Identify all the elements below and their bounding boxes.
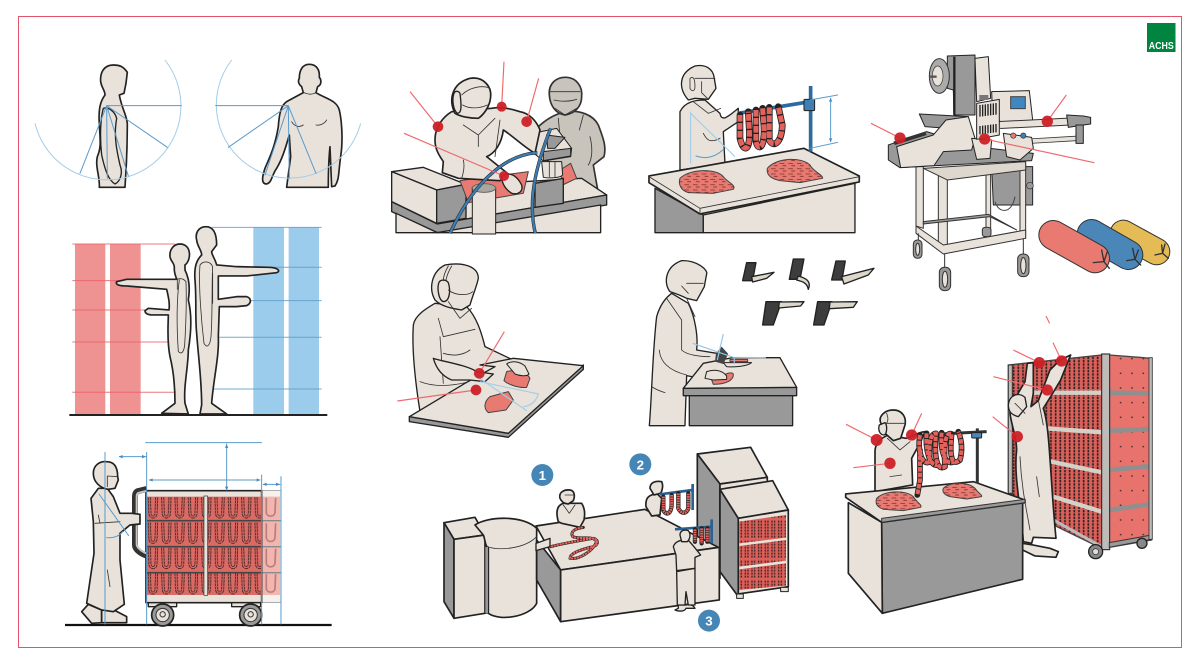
floor line — [69, 412, 327, 418]
panel: reach height comparison — [69, 227, 327, 415]
cart extension ghost — [262, 491, 281, 603]
air hoses — [450, 128, 551, 233]
workstation person 3 — [673, 530, 701, 611]
badge 2: 2 — [637, 457, 644, 472]
sausage piles — [679, 159, 823, 193]
badge 3: 3 — [705, 614, 713, 629]
cart with sausages — [146, 491, 262, 607]
hopper and body — [888, 114, 1033, 168]
knife 4 — [763, 302, 782, 325]
red height bars — [72, 244, 175, 415]
worker — [649, 261, 723, 426]
badge 1: 1 — [539, 468, 547, 483]
hanging sausages — [740, 107, 782, 148]
logo: ACHS: ACHS — [1149, 40, 1174, 52]
panel: two workers at trimming station — [392, 62, 607, 234]
knife 5 blade — [829, 302, 857, 309]
badge 2 — [629, 453, 651, 475]
tall rack — [1008, 354, 1152, 559]
hanging sausages — [917, 432, 962, 495]
panel: stuffing machine — [871, 55, 1168, 291]
knife 1 — [743, 263, 756, 281]
worker — [413, 264, 528, 412]
workstation person 2 — [646, 481, 663, 516]
worker — [680, 66, 738, 170]
figure: tall worker — [195, 227, 279, 414]
knife 2 blade — [797, 276, 809, 289]
workbench — [392, 178, 607, 233]
sausage strand on table — [551, 527, 597, 559]
stand — [738, 86, 815, 152]
posture lines — [693, 334, 766, 364]
machine frame — [916, 162, 1026, 254]
panel: production line overview — [444, 447, 788, 632]
strain points — [397, 332, 504, 401]
table — [649, 148, 859, 233]
hanging rack 3 — [675, 519, 712, 543]
bench — [683, 358, 797, 426]
main worker — [435, 78, 540, 194]
meat and hands — [705, 347, 752, 384]
badge 3 — [698, 610, 720, 632]
knife 5 — [814, 302, 832, 325]
posture lines and dimensions — [99, 443, 281, 624]
machine casters — [913, 227, 1029, 291]
knife 1 blade — [752, 272, 774, 282]
arm over table — [433, 358, 493, 382]
worker — [82, 462, 140, 623]
tabletop — [846, 482, 1025, 522]
storage rack — [720, 481, 788, 598]
panel: standing cutting at bench with knives — [649, 259, 874, 426]
range of motion: front view — [216, 60, 361, 178]
posture lines — [691, 95, 838, 163]
motor and flywheel — [929, 55, 991, 115]
extension arms — [1000, 115, 1091, 143]
panel: shoulder range of motion figures — [35, 60, 361, 187]
strain points — [846, 316, 1067, 469]
floor line — [65, 621, 332, 628]
hopper unit — [444, 517, 537, 618]
panel: hanging and racking sausages — [846, 316, 1152, 613]
worker reaching up — [1008, 355, 1071, 557]
background worker — [537, 77, 605, 193]
tall cabinet back — [697, 447, 767, 578]
left block — [392, 167, 466, 223]
control panel — [992, 91, 1033, 123]
workstation person 1 — [557, 490, 585, 527]
vent housing — [977, 95, 999, 139]
cart handle — [135, 489, 147, 556]
stand — [940, 428, 987, 483]
sausage casing rolls — [1053, 233, 1168, 268]
badge 1 — [531, 464, 553, 486]
cart wheels — [152, 604, 262, 626]
strain points — [404, 62, 539, 181]
range of motion: side view — [35, 60, 181, 180]
meat on bench — [460, 163, 577, 203]
panel: hanging sausages at stand — [649, 66, 859, 233]
machine — [533, 128, 572, 207]
hanging rack 2 — [660, 484, 693, 513]
figure: side view — [97, 65, 127, 187]
low table — [409, 358, 583, 437]
blue roll — [1092, 234, 1141, 265]
blue height bars — [212, 227, 322, 415]
panel: worker pushing cart — [65, 443, 332, 626]
posture lines — [473, 374, 538, 411]
column — [472, 184, 496, 234]
sausage piles — [876, 483, 982, 511]
conveyor table — [536, 509, 719, 622]
meat cuts — [485, 362, 530, 413]
logo: ACHS — [1147, 23, 1176, 52]
workstation table — [848, 502, 1023, 613]
knife 3 — [832, 261, 845, 280]
figure: short worker — [116, 244, 191, 414]
knife 4 blade — [779, 302, 804, 308]
knife 2 — [789, 259, 804, 279]
panel: cutting at low table — [397, 264, 583, 437]
worker at table — [875, 410, 925, 492]
knives — [743, 259, 874, 325]
figure: front view — [263, 64, 342, 187]
strain points — [871, 95, 1094, 163]
red roll — [1053, 235, 1109, 268]
knife 3 blade — [842, 268, 874, 284]
yellow roll — [1123, 233, 1168, 258]
machine back column — [992, 167, 1033, 210]
